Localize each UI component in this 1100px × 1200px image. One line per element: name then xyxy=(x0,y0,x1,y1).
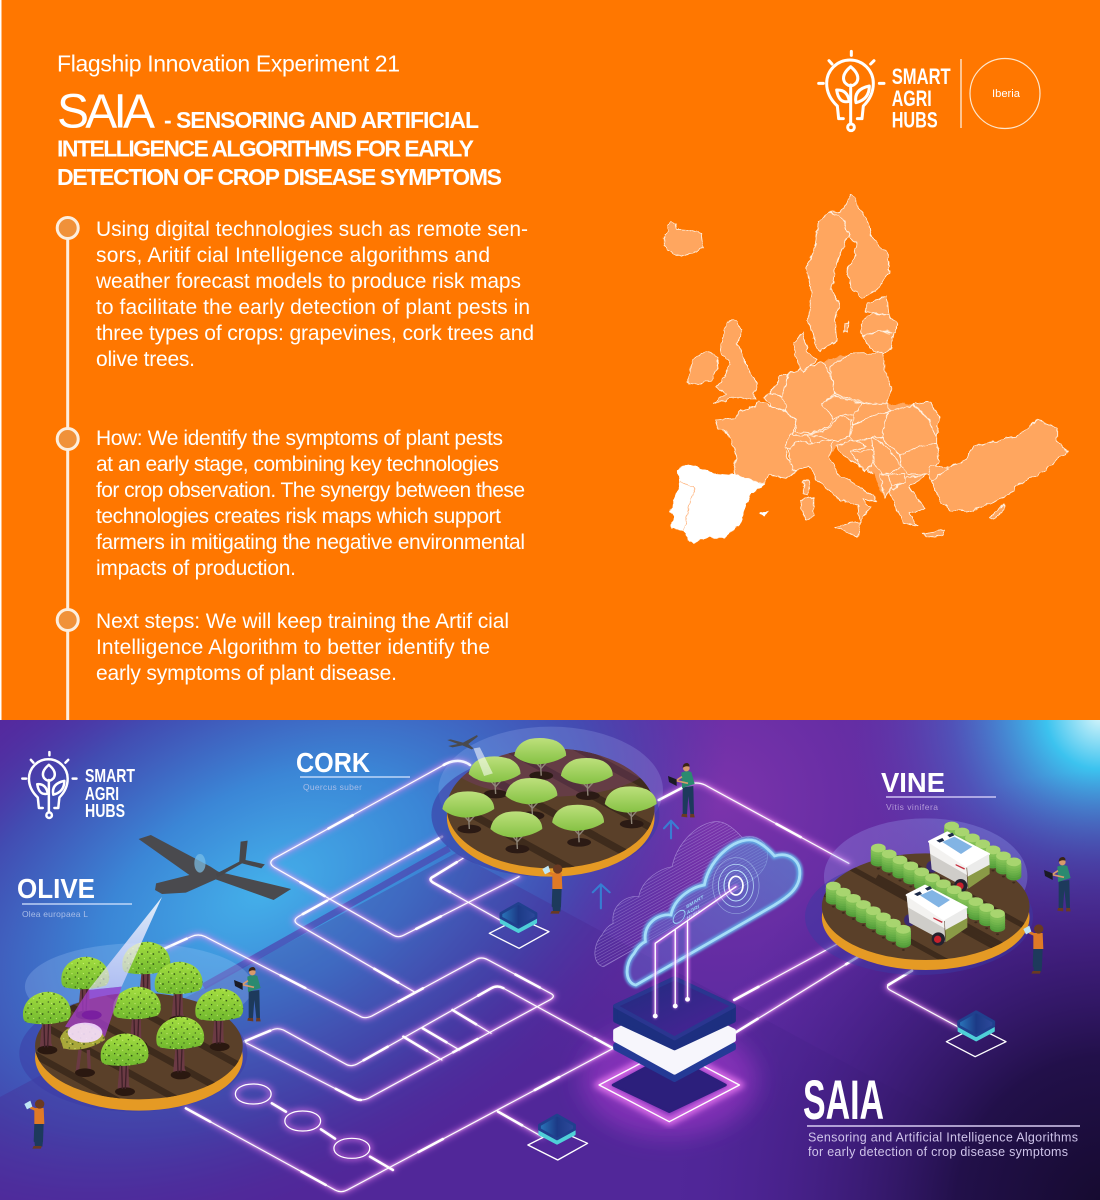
chip 1 xyxy=(489,903,549,948)
farmer with tablet near olive xyxy=(24,1099,44,1149)
label: vine: Vitis vinifera xyxy=(886,802,938,812)
text block: how xyxy=(96,427,525,580)
small drone xyxy=(447,735,478,749)
main title xyxy=(57,86,502,190)
vine row middle xyxy=(878,848,998,935)
drone shadow band xyxy=(203,848,449,987)
plot: vine base xyxy=(805,818,1033,975)
plot: olive base xyxy=(20,944,252,1111)
label: vine xyxy=(881,767,996,812)
logo: Smart Agri Hubs xyxy=(22,752,135,821)
SAIA project title block: Sensoring and Artificial Intelligence Algorithms xyxy=(808,1130,1078,1144)
text block: overview: Using digital technologies such as remote sen- xyxy=(96,218,528,241)
label: vine: VINE xyxy=(881,767,945,798)
farmer with laptop near vine xyxy=(1044,857,1071,911)
big drone xyxy=(139,835,291,900)
arrows up xyxy=(593,821,678,908)
text block: how: technologies creates risk maps which support xyxy=(96,505,501,528)
text block: overview: olive trees. xyxy=(96,348,195,371)
label: cork: Quercus suber xyxy=(303,782,362,792)
text block: overview: to facilitate the early detection of plant pests in xyxy=(96,296,530,319)
text block: next steps: Next steps: We will keep training the Artif cial xyxy=(96,610,509,633)
scan beam from drone xyxy=(88,897,162,990)
server stack xyxy=(615,978,734,1080)
cloud: AGRI xyxy=(687,904,700,916)
vine row back xyxy=(952,826,1023,888)
farmer with tablet near vine xyxy=(1023,924,1043,974)
farmer with laptop near cork xyxy=(668,763,695,817)
text block: how: for crop observation. The synergy between these xyxy=(96,479,525,502)
label: olive: Olea europaea L xyxy=(22,909,88,919)
logo: Smart Agri Hubs Iberia: SMART xyxy=(892,64,951,89)
logo: Smart Agri Hubs: HUBS xyxy=(85,801,125,821)
server glow xyxy=(582,1023,757,1137)
logo: Smart Agri Hubs Iberia: AGRI xyxy=(892,86,932,111)
vine rows and robots xyxy=(833,826,1023,953)
timeline with three markers xyxy=(57,218,78,721)
text block: how: impacts of production. xyxy=(96,557,296,580)
farmer with laptop near olive xyxy=(234,967,261,1021)
bottom illustration background xyxy=(0,720,1100,1200)
main title: INTELLIGENCE ALGORITHMS FOR EARLY xyxy=(57,136,474,162)
logo: Smart Agri Hubs: SMART xyxy=(85,766,135,786)
SAIA project title block: for early detection of crop disease symptoms xyxy=(808,1145,1068,1159)
text block: overview: sors, Aritif cial Intelligence algorithms and xyxy=(96,244,490,267)
logo: Smart Agri Hubs Iberia: HUBS xyxy=(892,108,938,132)
main title: DETECTION OF CROP DISEASE SYMPTOMS xyxy=(57,164,502,190)
main title: - SENSORING AND ARTIFICIAL xyxy=(164,107,479,133)
plot: cork xyxy=(432,726,663,877)
vine row front xyxy=(833,886,908,953)
main title: SAIA xyxy=(57,86,155,138)
logo: Smart Agri Hubs Iberia: Iberia xyxy=(992,88,1021,100)
farmer with tablet near cork xyxy=(542,864,562,914)
text block: next steps: early symptoms of plant disease. xyxy=(96,662,397,685)
logo: Smart Agri Hubs Iberia xyxy=(819,51,1040,132)
chips xyxy=(489,903,1006,1160)
label: cork: CORK xyxy=(296,747,370,778)
text block: next steps xyxy=(96,610,509,685)
map of Europe with Iberia highlighted xyxy=(663,195,1068,543)
text block: how: at an early stage, combining key technologies xyxy=(96,453,499,476)
label: cork xyxy=(296,747,410,792)
label: olive xyxy=(17,873,132,919)
logo: Smart Agri Hubs: AGRI xyxy=(85,784,119,804)
text block: overview: weather forecast models to produce risk maps xyxy=(95,270,521,293)
olive trees xyxy=(23,897,243,1096)
SAIA project title block xyxy=(803,1068,1080,1159)
robot back xyxy=(926,832,990,892)
chip 3 xyxy=(946,1012,1006,1057)
chip 2 xyxy=(528,1115,588,1160)
cloud: HUBS xyxy=(687,908,701,922)
robot front xyxy=(904,886,967,946)
overline: Flagship Innovation Experiment 21: Flagship Innovation Experiment 21 xyxy=(57,50,400,76)
text block: next steps: Intelligence Algorithm to better identify the xyxy=(96,636,490,659)
text block: overview: three types of crops: grapevines, cork trees and xyxy=(96,322,534,345)
SAIA project title block: SAIA xyxy=(803,1068,884,1131)
server base plate xyxy=(599,1048,739,1122)
circuit lines xyxy=(161,761,958,1192)
label: olive: OLIVE xyxy=(17,873,95,904)
orange header panel xyxy=(0,0,1100,721)
text block: overview xyxy=(95,218,534,371)
cloud xyxy=(595,822,800,1018)
text block: how: How: We identify the symptoms of plant pests xyxy=(96,427,503,450)
text block: how: farmers in mitigating the negative environmental xyxy=(96,531,525,554)
cloud: SMART xyxy=(686,894,705,910)
isometric scene xyxy=(0,717,1033,1192)
